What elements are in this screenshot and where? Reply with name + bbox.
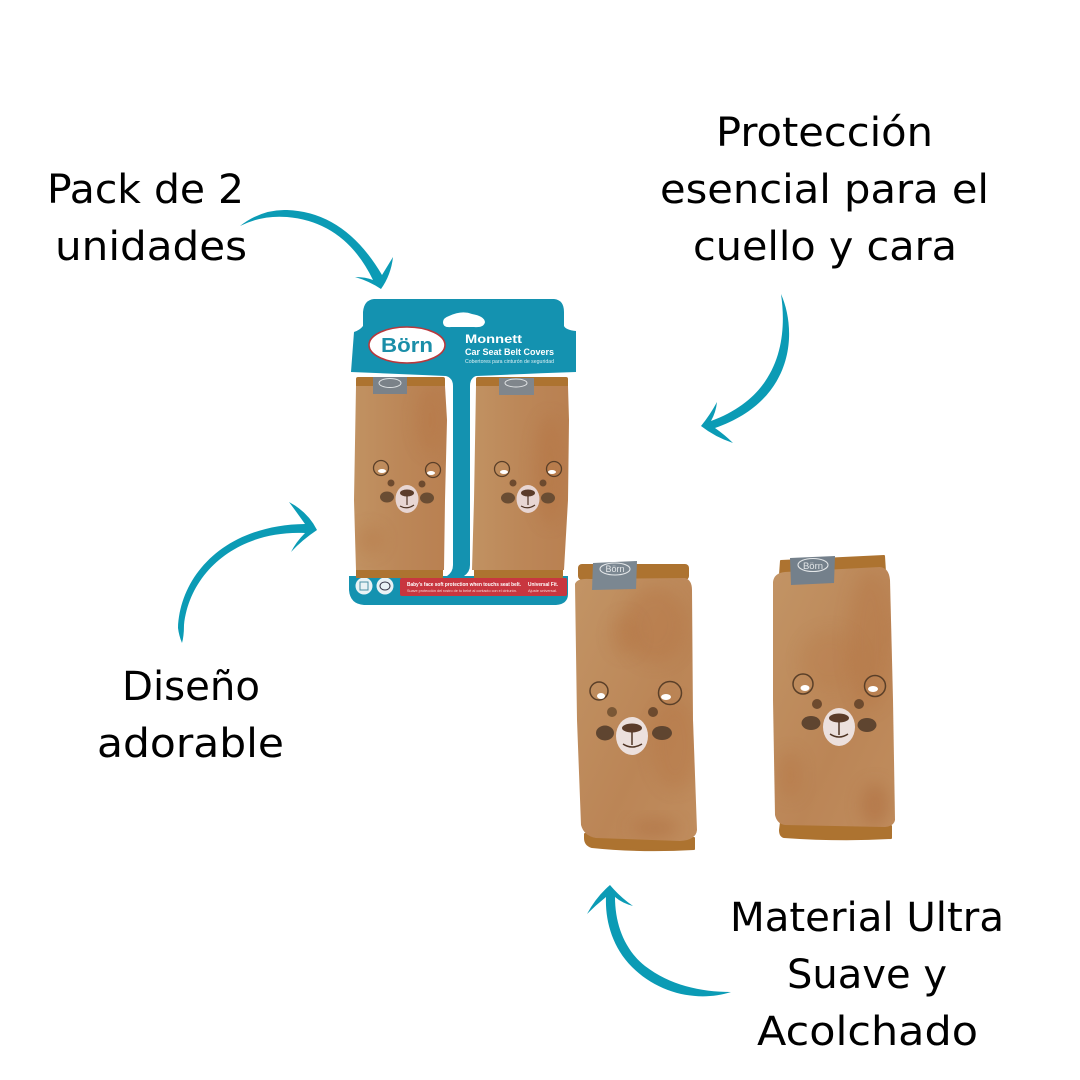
text: Diseño adorable: Diseño (122, 664, 260, 710)
text: Diseño adorable (97, 664, 284, 767)
text: Protección esencial (660, 110, 989, 270)
card footer icons (356, 578, 394, 594)
product: large left pad (575, 561, 699, 850)
pad in card: left (354, 377, 447, 578)
card hanger hole (443, 312, 485, 327)
text: Protección esencial: Protección (716, 110, 933, 156)
trims (578, 564, 689, 580)
grey tag (592, 561, 637, 590)
face (590, 682, 608, 700)
card footer red banner: Ajuste universal. (528, 588, 557, 593)
product: large right pad (773, 556, 895, 839)
card title (465, 332, 554, 365)
card footer red banner (400, 578, 567, 596)
arrow: pack to card (240, 210, 393, 289)
text: Material Ultra Suave y Acolchado: Material Ultra (730, 895, 1004, 941)
card title: Car Seat Belt Covers (465, 347, 554, 358)
text: Pack de 2 unidades: Pack de 2 (47, 167, 244, 213)
text: Protección esencial: esencial para el (660, 167, 989, 213)
card footer red banner: Baby's face soft protection when touchs seat belt. (407, 582, 522, 588)
product: large right pad: Börn (803, 561, 823, 572)
text: Diseño adorable: adorable (97, 721, 284, 767)
pad in card: right (472, 377, 569, 578)
arrow: protection to pads (701, 294, 789, 443)
face (793, 674, 813, 694)
logo oval: Börn (381, 335, 433, 357)
card backing (349, 299, 576, 605)
panel: product card (349, 299, 576, 605)
card footer red banner: Suave protección del rostro de tu bebé al contacto con el cinturón. (407, 588, 517, 593)
text: Protección esencial: cuello y cara (693, 224, 957, 270)
card footer red banner: Universal Fit. (528, 582, 559, 588)
text: Material Ultra Suave y Acolchado: Acolchado (757, 1009, 978, 1055)
plush body (773, 567, 895, 827)
arrow: design to card (178, 502, 317, 643)
arrow: material to pads (587, 885, 731, 996)
text: Material Ultra Suave y Acolchado: Suave y (787, 952, 947, 998)
text: Material Ultra Suave y Acolchado (730, 895, 1004, 1055)
product: large left pad: Börn (605, 564, 625, 574)
text: Pack de 2 unidades (47, 167, 247, 270)
plush body (575, 578, 697, 841)
text: Pack de 2 unidades: unidades (55, 224, 247, 270)
grey tag (790, 556, 835, 585)
card title: Cobertores para cinturón de seguridad (465, 359, 554, 365)
card title: Monnett (465, 332, 522, 346)
logo oval (369, 327, 445, 363)
trims (780, 556, 885, 575)
